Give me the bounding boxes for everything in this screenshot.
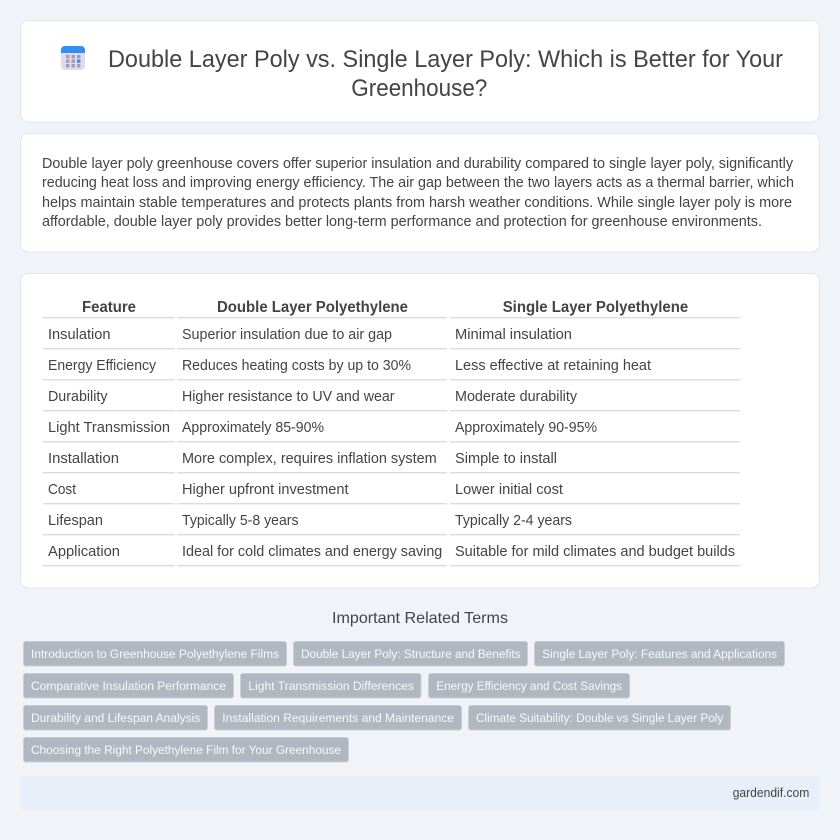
- table header: Single Layer Polyethylene: [503, 299, 688, 316]
- row: durability: [48, 389, 578, 405]
- tag: Double Layer Poly: Structure and Benefits: [301, 647, 520, 661]
- panel: summary paragraph: [20, 134, 820, 252]
- row: cost: Higher upfront investment: [182, 482, 348, 498]
- row: insulation: Insulation: [48, 327, 110, 343]
- tag list: [24, 642, 784, 762]
- tag: Energy Efficiency and Cost Savings: [436, 679, 622, 693]
- row: cost: Cost: [48, 482, 76, 498]
- title: [108, 46, 783, 102]
- row: lifespan: Lifespan: [48, 513, 103, 529]
- tag: Choosing the Right Polyethylene Film for Your Greenhouse: [31, 743, 341, 757]
- footer source: gardendif.com: [733, 785, 809, 800]
- tag: [428, 674, 630, 698]
- row: installation: [48, 451, 557, 467]
- row: lifespan: Typically 5-8 years: [182, 513, 298, 529]
- text block: summary: affordable, double layer poly provides better long-term performance and protection for greenhouse environments.: [42, 214, 762, 230]
- row: energy efficiency: Energy Efficiency: [48, 358, 157, 374]
- row: light transmission: Light Transmission: [48, 420, 170, 436]
- row: energy efficiency: [48, 358, 651, 374]
- row: application: [48, 544, 735, 560]
- row: durability: Durability: [48, 389, 108, 405]
- panel: comparison table: [20, 274, 820, 588]
- table header: [82, 299, 688, 316]
- tag: [24, 674, 234, 698]
- text block: summary: reducing heat loss and improving energy efficiency. The air gap between the two layers acts as a thermal barrier, which: [42, 175, 794, 191]
- row: application: Application: [48, 544, 120, 560]
- row: light transmission: [48, 420, 597, 436]
- row: installation: Installation: [48, 451, 119, 467]
- row: cost: Lower initial cost: [455, 482, 563, 498]
- tag: [468, 706, 730, 730]
- row: application: Suitable for mild climates and budget builds: [455, 544, 735, 560]
- tag: Climate Suitability: Double vs Single Layer Poly: [476, 711, 724, 725]
- row: insulation: [48, 327, 572, 343]
- text block: summary: [42, 156, 794, 230]
- tag: [24, 706, 208, 730]
- text block: summary: helps maintain stable temperatures and protects plants from harsh weather conditions. While single layer poly is more: [42, 195, 792, 211]
- row: energy efficiency: Reduces heating costs by up to 30%: [182, 358, 411, 374]
- row: cost: [48, 482, 563, 498]
- tag: [24, 642, 286, 666]
- icon: calendar: [61, 46, 85, 70]
- row: application: Ideal for cold climates and energy saving: [182, 544, 442, 560]
- tag: [24, 738, 348, 762]
- title: Double Layer Poly vs. Single Layer Poly: Which is Better for Your: [108, 46, 783, 73]
- heading: important related terms: Important Related Terms: [332, 610, 508, 627]
- row: installation: Simple to install: [455, 451, 557, 467]
- row: lifespan: Typically 2-4 years: [455, 513, 572, 529]
- tag: Comparative Insulation Performance: [31, 679, 226, 693]
- tag: Light Transmission Differences: [248, 679, 414, 693]
- row: durability: Moderate durability: [455, 389, 578, 405]
- row: energy efficiency: Less effective at retaining heat: [455, 358, 651, 374]
- table row lines: [43, 317, 740, 566]
- row: insulation: Superior insulation due to air gap: [182, 327, 392, 343]
- text block: summary: Double layer poly greenhouse covers offer superior insulation and durability compared to single layer poly, significantly: [42, 156, 794, 172]
- row: light transmission: Approximately 90-95%: [455, 420, 597, 436]
- tag: Installation Requirements and Maintenance: [222, 711, 454, 725]
- tag: [294, 642, 528, 666]
- row: installation: More complex, requires inflation system: [182, 451, 437, 467]
- row: lifespan: [48, 513, 572, 529]
- tag: Introduction to Greenhouse Polyethylene Films: [31, 647, 279, 661]
- row: insulation: Minimal insulation: [455, 327, 572, 343]
- table header: Double Layer Polyethylene: [217, 299, 408, 316]
- tag: [214, 706, 462, 730]
- tag: Single Layer Poly: Features and Applications: [542, 647, 777, 661]
- tag: [534, 642, 784, 666]
- row: durability: Higher resistance to UV and wear: [182, 389, 395, 405]
- panel: title header: [20, 20, 820, 122]
- tag: [240, 674, 421, 698]
- table header: Feature: [82, 299, 136, 316]
- title: Greenhouse?: [351, 75, 487, 102]
- row: light transmission: Approximately 85-90%: [182, 420, 324, 436]
- tag: Durability and Lifespan Analysis: [31, 711, 200, 725]
- footer bar: [20, 776, 820, 810]
